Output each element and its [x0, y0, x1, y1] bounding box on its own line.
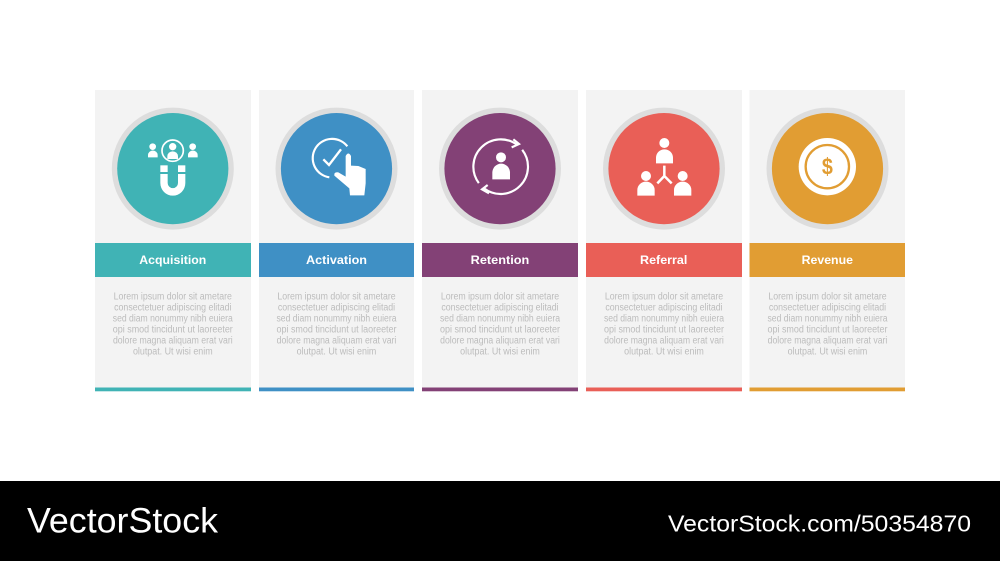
text block: revenue: consectetuer adipiscing elitadi — [769, 302, 886, 313]
header: retention: Retention — [471, 255, 529, 267]
text block: acquisition: Lorem ipsum dolor sit ametare — [114, 291, 232, 302]
text block: acquisition: olutpat. Ut wisi enim — [133, 346, 213, 358]
header: retention — [422, 243, 578, 277]
circle badge: activation — [276, 108, 398, 230]
text block: retention: olutpat. Ut wisi enim — [460, 346, 540, 358]
text block: acquisition: consectetuer adipiscing elitadi — [114, 302, 231, 313]
header: referral — [586, 243, 742, 277]
text block: activation — [276, 291, 397, 358]
bottom bar: retention — [422, 388, 578, 391]
text block: referral: dolore magna aliquam erat vari — [604, 336, 724, 346]
panel: retention — [422, 90, 578, 391]
icon: person in circular arrows — [473, 139, 528, 194]
text block: referral: consectetuer adipiscing elitadi — [605, 302, 723, 313]
text block: retention: opi smod tincidunt ut laoreeter — [440, 324, 561, 336]
header: acquisition: Acquisition — [139, 255, 206, 267]
text block: revenue: sed diam nonummy nibh euiera — [768, 313, 888, 324]
panel: acquisition — [95, 90, 251, 391]
panel: referral — [586, 90, 742, 391]
icon: three connected people — [637, 138, 691, 196]
header: revenue: Revenue — [802, 255, 853, 267]
text block: revenue: opi smod tincidunt ut laoreeter — [768, 324, 888, 336]
icon: dollar coin: $ — [822, 153, 833, 179]
text block: activation: dolore magna aliquam erat vari — [277, 336, 396, 346]
footer logo: VectorStock — [27, 502, 219, 541]
text block: referral: opi smod tincidunt ut laoreeter — [604, 324, 725, 336]
icon: dollar coin — [799, 138, 856, 195]
text block: referral: olutpat. Ut wisi enim — [624, 346, 704, 358]
circle badge: referral — [603, 108, 725, 230]
text block: revenue — [768, 291, 888, 358]
circle badge: retention — [439, 108, 561, 230]
icon: magnet attracting people — [148, 140, 198, 196]
header: activation: Activation — [306, 255, 367, 267]
header: activation — [259, 243, 414, 277]
text block: acquisition — [113, 291, 234, 358]
bottom bar: acquisition — [95, 388, 251, 391]
circle badge: acquisition — [112, 108, 234, 230]
text block: revenue: Lorem ipsum dolor sit ametare — [768, 291, 887, 302]
panel: revenue — [750, 90, 905, 391]
text block: acquisition: opi smod tincidunt ut laoreeter — [113, 324, 234, 336]
bottom bar: referral — [586, 388, 742, 391]
circle badge: revenue — [766, 108, 888, 230]
text block: acquisition: sed diam nonummy nibh euiera — [113, 313, 233, 324]
text block: referral: sed diam nonummy nibh euiera — [604, 313, 725, 324]
text block: retention — [440, 291, 561, 358]
header: revenue — [750, 243, 905, 277]
text block: activation: Lorem ipsum dolor sit ametare — [277, 291, 396, 302]
text block: activation: consectetuer adipiscing elitadi — [278, 302, 395, 313]
text block: retention: dolore magna aliquam erat vari — [440, 336, 560, 346]
text block: activation: olutpat. Ut wisi enim — [297, 346, 376, 358]
icon: hand tapping check mark — [313, 139, 366, 195]
text block: retention: Lorem ipsum dolor sit ametare — [441, 291, 559, 302]
text block: retention: sed diam nonummy nibh euiera — [440, 313, 561, 324]
bottom bar: revenue — [750, 388, 905, 391]
text block: acquisition: dolore magna aliquam erat vari — [113, 336, 233, 346]
header: acquisition — [95, 243, 251, 277]
footer image id: VectorStock.com/50354870 — [668, 511, 971, 537]
bottom bar: activation — [259, 388, 414, 391]
text block: activation: sed diam nonummy nibh euiera — [276, 313, 397, 324]
text block: retention: consectetuer adipiscing elitadi — [441, 302, 559, 313]
text block: referral — [604, 291, 725, 358]
header: referral: Referral — [640, 255, 687, 267]
footer band — [0, 481, 1000, 561]
text block: revenue: olutpat. Ut wisi enim — [788, 346, 867, 358]
text block: revenue: dolore magna aliquam erat vari — [768, 336, 887, 346]
text block: referral: Lorem ipsum dolor sit ametare — [605, 291, 723, 302]
text block: activation: opi smod tincidunt ut laoreeter — [276, 324, 397, 336]
panel: activation — [259, 90, 414, 391]
